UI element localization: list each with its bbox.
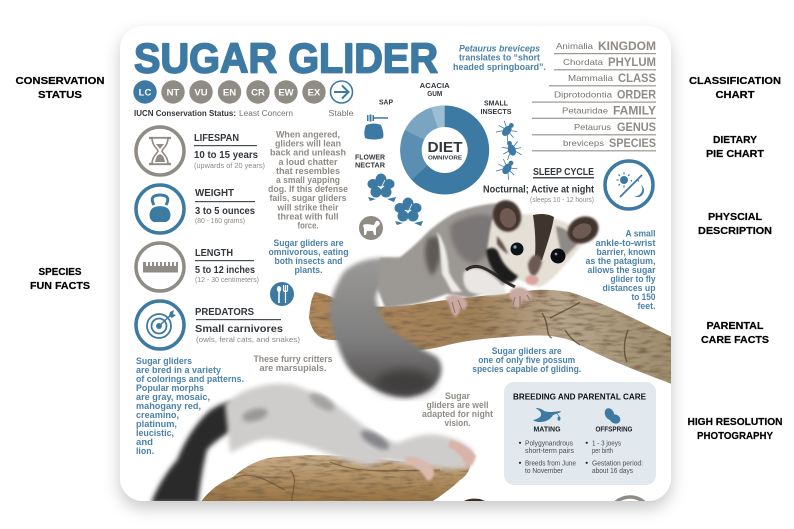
text: species translation <box>453 44 546 72</box>
text: patagium description: as the patagium, <box>586 256 656 266</box>
text: colour morphs: are bred in a variety <box>136 365 221 375</box>
icon: yapping dog <box>359 216 383 240</box>
icon: predators target <box>136 301 184 349</box>
side label: physical description: DESCRIPTION <box>698 225 772 237</box>
text: omnivorous fact <box>268 238 348 275</box>
text: omnivorous fact: Sugar gliders are <box>274 238 344 248</box>
status: EX: EX <box>308 88 321 98</box>
label: small insects <box>480 98 512 116</box>
conservation status text <box>134 109 354 118</box>
side label: classification chart: CLASSIFICATION <box>689 75 781 87</box>
classification chart <box>532 39 656 151</box>
side label: high resolution photography: PHOTOGRAPHY <box>697 430 773 442</box>
text: anger behaviour: force. <box>298 220 318 230</box>
side label: dietary pie chart: DIETARY <box>713 134 757 146</box>
classification chart: Chordata <box>563 57 603 67</box>
panel: breeding and parental care: Breeds from June <box>525 460 576 468</box>
classification chart: SPECIES <box>609 136 656 150</box>
panel: breeding and parental care: Polygynandrous <box>525 440 573 448</box>
text: gliding species fact: species capable of gliding. <box>472 364 581 374</box>
label: acacia gum: GUM <box>427 89 442 98</box>
lifespan facts: LIFESPAN <box>194 132 239 144</box>
icon: sap jar and dipper <box>364 114 388 140</box>
classification chart: ORDER <box>617 88 656 102</box>
panel: breeding and parental care: MATING <box>534 426 561 434</box>
head <box>487 214 583 287</box>
white belly patch <box>463 268 507 295</box>
text: colour morphs: mahogany red, <box>136 401 201 411</box>
text: anger behaviour: will strike their <box>277 202 339 212</box>
icon: stable trend arrow <box>330 81 352 103</box>
text: patagium description: A small <box>626 229 656 239</box>
label: acacia gum: ACACIA <box>420 81 450 90</box>
text: patagium description <box>586 229 656 311</box>
text: patagium description: allows the sugar <box>588 265 656 275</box>
photo: lower sugar glider on branch <box>151 384 490 503</box>
text: night vision fact: vision. <box>444 418 470 428</box>
classification chart: KINGDOM <box>598 39 656 53</box>
icon: length ruler <box>136 243 184 291</box>
length facts: 5 to 12 inches <box>195 264 255 276</box>
classification chart: Mammalia <box>568 73 613 83</box>
text: gliding species fact <box>472 346 581 374</box>
text: patagium description: distances up <box>602 283 656 293</box>
label: sap: SAP <box>379 98 393 106</box>
status: VU: VU <box>194 88 208 98</box>
status: CR <box>246 80 270 104</box>
side label: species fun facts: SPECIES <box>38 266 82 278</box>
text: omnivorous fact: plants. <box>294 265 322 275</box>
tail <box>330 258 441 397</box>
text: colour morphs: Sugar gliders <box>136 356 192 366</box>
conservation status row <box>133 80 352 104</box>
text: colour morphs <box>136 356 244 456</box>
panel: breeding and parental care: short-term pairs <box>525 448 574 455</box>
side label: dietary pie chart <box>706 134 765 160</box>
text: species translation: Petaurus breviceps <box>459 44 540 54</box>
text: anger behaviour: back and unleash <box>270 148 346 158</box>
panel: breeding and parental care: about 16 days <box>592 468 633 475</box>
side label: dietary pie chart: PIE CHART <box>706 148 765 160</box>
text: colour morphs: leucistic, <box>136 428 174 438</box>
head markings <box>533 214 554 260</box>
lifespan facts <box>194 132 265 170</box>
text: night vision fact <box>422 391 493 428</box>
side label: species fun facts: FUN FACTS <box>30 280 90 292</box>
title: SUGAR GLIDER <box>134 34 438 82</box>
body <box>378 203 520 308</box>
conservation status text: Stable <box>328 109 354 118</box>
text: anger behaviour <box>268 130 348 230</box>
photo: upper sugar glider on branch <box>309 196 672 397</box>
icon: weight kettlebell <box>136 185 184 233</box>
icon: sleep cycle sun and moon <box>605 161 653 209</box>
text: omnivorous fact: omnivorous, eating <box>268 247 348 257</box>
icon: cropped gray circle at bottom edge <box>614 495 646 501</box>
panel: breeding and parental care <box>504 382 656 485</box>
text: gliding species fact: Sugar gliders are <box>492 346 562 356</box>
status: CR: CR <box>251 88 265 98</box>
status: LC: LC <box>139 88 151 98</box>
side label: conservation status <box>16 75 104 101</box>
label: acacia gum <box>420 81 450 98</box>
side label: parental care facts: CARE FACTS <box>701 334 769 346</box>
label: small insects: SMALL <box>484 98 508 108</box>
diet donut chart: DIET <box>428 139 462 156</box>
label: flower nectar: NECTAR <box>355 160 386 170</box>
text: anger behaviour: a small yapping <box>276 175 340 185</box>
diet donut chart: OMNIVORE <box>428 156 462 162</box>
text: colour morphs: Popular morphs <box>136 383 204 393</box>
side label: conservation status: CONSERVATION <box>16 75 104 87</box>
lifespan facts: 10 to 15 years <box>194 149 258 161</box>
side label: physical description: PHYSCIAL <box>708 211 763 223</box>
status: EW <box>274 80 298 104</box>
classification chart: Petaurus <box>574 122 611 132</box>
panel: breeding and parental care: to November <box>525 468 564 475</box>
icon: stork <box>533 408 561 422</box>
panel: breeding and parental care: per birth <box>592 448 613 455</box>
label: flower nectar <box>355 152 386 170</box>
label: flower nectar: FLOWER <box>355 152 386 162</box>
classification chart: Petauridae <box>562 106 608 116</box>
classification chart: Animalia <box>556 41 593 51</box>
icon: fork and knife <box>270 282 294 306</box>
classification chart: breviceps <box>563 138 604 148</box>
diet donut chart <box>400 106 489 194</box>
panel: breeding and parental care: 1 - 3 joeys <box>592 440 621 448</box>
conservation status text: Least Concern <box>239 109 293 118</box>
panel: infographic card <box>120 26 671 501</box>
text: night vision fact: adapted for night <box>422 409 493 419</box>
lifespan facts: (upwards of 20 years) <box>194 161 265 170</box>
text: colour morphs: platinum, <box>136 419 177 429</box>
text: colour morphs: of colorings and patterns. <box>136 374 244 384</box>
length facts: LENGTH <box>195 247 233 259</box>
side label: classification chart: CHART <box>716 89 755 101</box>
text: marsupials fact <box>254 354 332 373</box>
icon: lifespan hourglass <box>136 127 184 175</box>
text: gliding species fact: one of only five possum <box>478 355 575 365</box>
predators facts: PREDATORS <box>195 306 254 318</box>
side label: physical description <box>698 211 772 237</box>
text: anger behaviour: fails, sugar gliders <box>270 193 346 203</box>
text: species translation: headed springboard”. <box>453 62 546 72</box>
text: anger behaviour: dog. If this defense <box>268 184 348 194</box>
status: LC <box>133 80 157 104</box>
panel: breeding and parental care: BREEDING AND PARENTAL CARE <box>513 392 646 402</box>
weight facts <box>195 187 255 225</box>
sleep cycle facts: Nocturnal; Active at night <box>483 184 595 196</box>
icon: flower 1 <box>368 174 396 202</box>
side label: parental care facts <box>701 320 769 346</box>
text: marsupials fact: These furry critters <box>254 354 332 364</box>
icon: insect 2 <box>500 138 524 161</box>
text: colour morphs: and <box>136 437 153 447</box>
text: colour morphs: lion. <box>136 446 154 456</box>
status: EN <box>218 80 241 104</box>
paws <box>509 287 532 308</box>
weight facts: WEIGHT <box>195 187 235 199</box>
text: colour morphs: are gray, mosaic, <box>136 392 210 402</box>
text: patagium description: ankle-to-wrist <box>596 238 656 248</box>
text: patagium description: glider to fly <box>610 274 656 284</box>
text: patagium description: to 150 <box>632 292 656 302</box>
ears <box>491 198 523 234</box>
classification chart: CLASS <box>618 71 656 85</box>
classification chart: Diprotodontia <box>554 90 612 100</box>
text: species translation: translates to “short <box>459 53 540 63</box>
text: marsupials fact: are marsupials. <box>260 363 326 373</box>
icon: flower 2 <box>394 198 423 226</box>
branch <box>309 290 672 384</box>
status: EW: EW <box>278 88 294 98</box>
text: patagium description: feet. <box>638 301 656 311</box>
status: EX <box>302 80 326 104</box>
status: NT: NT <box>167 88 180 98</box>
predators facts: Small carnivores <box>195 323 283 335</box>
weight facts: 3 to 5 ounces <box>195 205 255 217</box>
text: night vision fact: Sugar <box>445 391 470 401</box>
side label: species fun facts <box>30 266 90 292</box>
panel: breeding and parental care: Gestation period: <box>592 460 643 468</box>
predators facts: (owls, feral cats, and snakes) <box>196 335 301 344</box>
length facts <box>195 247 259 284</box>
predators facts <box>195 306 301 344</box>
panel: breeding and parental care: OFFSPRING <box>596 426 633 434</box>
nose <box>526 275 538 285</box>
side label: classification chart <box>689 75 781 101</box>
sleep cycle facts: SLEEP CYCLE <box>533 166 594 178</box>
text: colour morphs: creamino, <box>136 410 179 420</box>
status: EN: EN <box>223 88 236 98</box>
classification chart: GENUS <box>617 120 656 134</box>
classification chart: FAMILY <box>613 104 656 118</box>
sleep cycle facts: (sleeps 10 - 12 hours) <box>530 195 594 204</box>
length facts: (12 - 30 centimeters) <box>195 275 259 284</box>
text: anger behaviour: that resembles <box>276 166 340 176</box>
icon: insect 1 <box>494 118 520 143</box>
label: small insects: INSECTS <box>480 107 512 116</box>
text: patagium description: barrier, known <box>596 247 656 257</box>
status: NT <box>161 80 185 104</box>
side label: high resolution photography <box>688 416 782 442</box>
text: anger behaviour: a loud chatter <box>278 157 338 167</box>
classification chart: PHYLUM <box>608 55 656 69</box>
eyes <box>510 242 524 256</box>
sleep cycle facts <box>483 166 595 204</box>
conservation status text: IUCN Conservation Status: <box>134 109 236 118</box>
weight facts: (80 - 160 grams) <box>195 216 245 225</box>
text: night vision fact: gliders are well <box>426 400 488 410</box>
icon: insect 3 <box>495 156 520 181</box>
side label: parental care facts: PARENTAL <box>706 320 764 332</box>
status: VU <box>189 80 213 104</box>
text: anger behaviour: gliders will lean <box>275 139 341 149</box>
text: anger behaviour: When angered, <box>276 130 340 140</box>
text: omnivorous fact: both insects and <box>274 256 342 266</box>
icon: eggs <box>603 407 622 425</box>
side label: conservation status: STATUS <box>38 89 82 101</box>
text: anger behaviour: threat with full <box>278 211 338 221</box>
side label: high resolution photography: HIGH RESOLUTION <box>688 416 782 428</box>
